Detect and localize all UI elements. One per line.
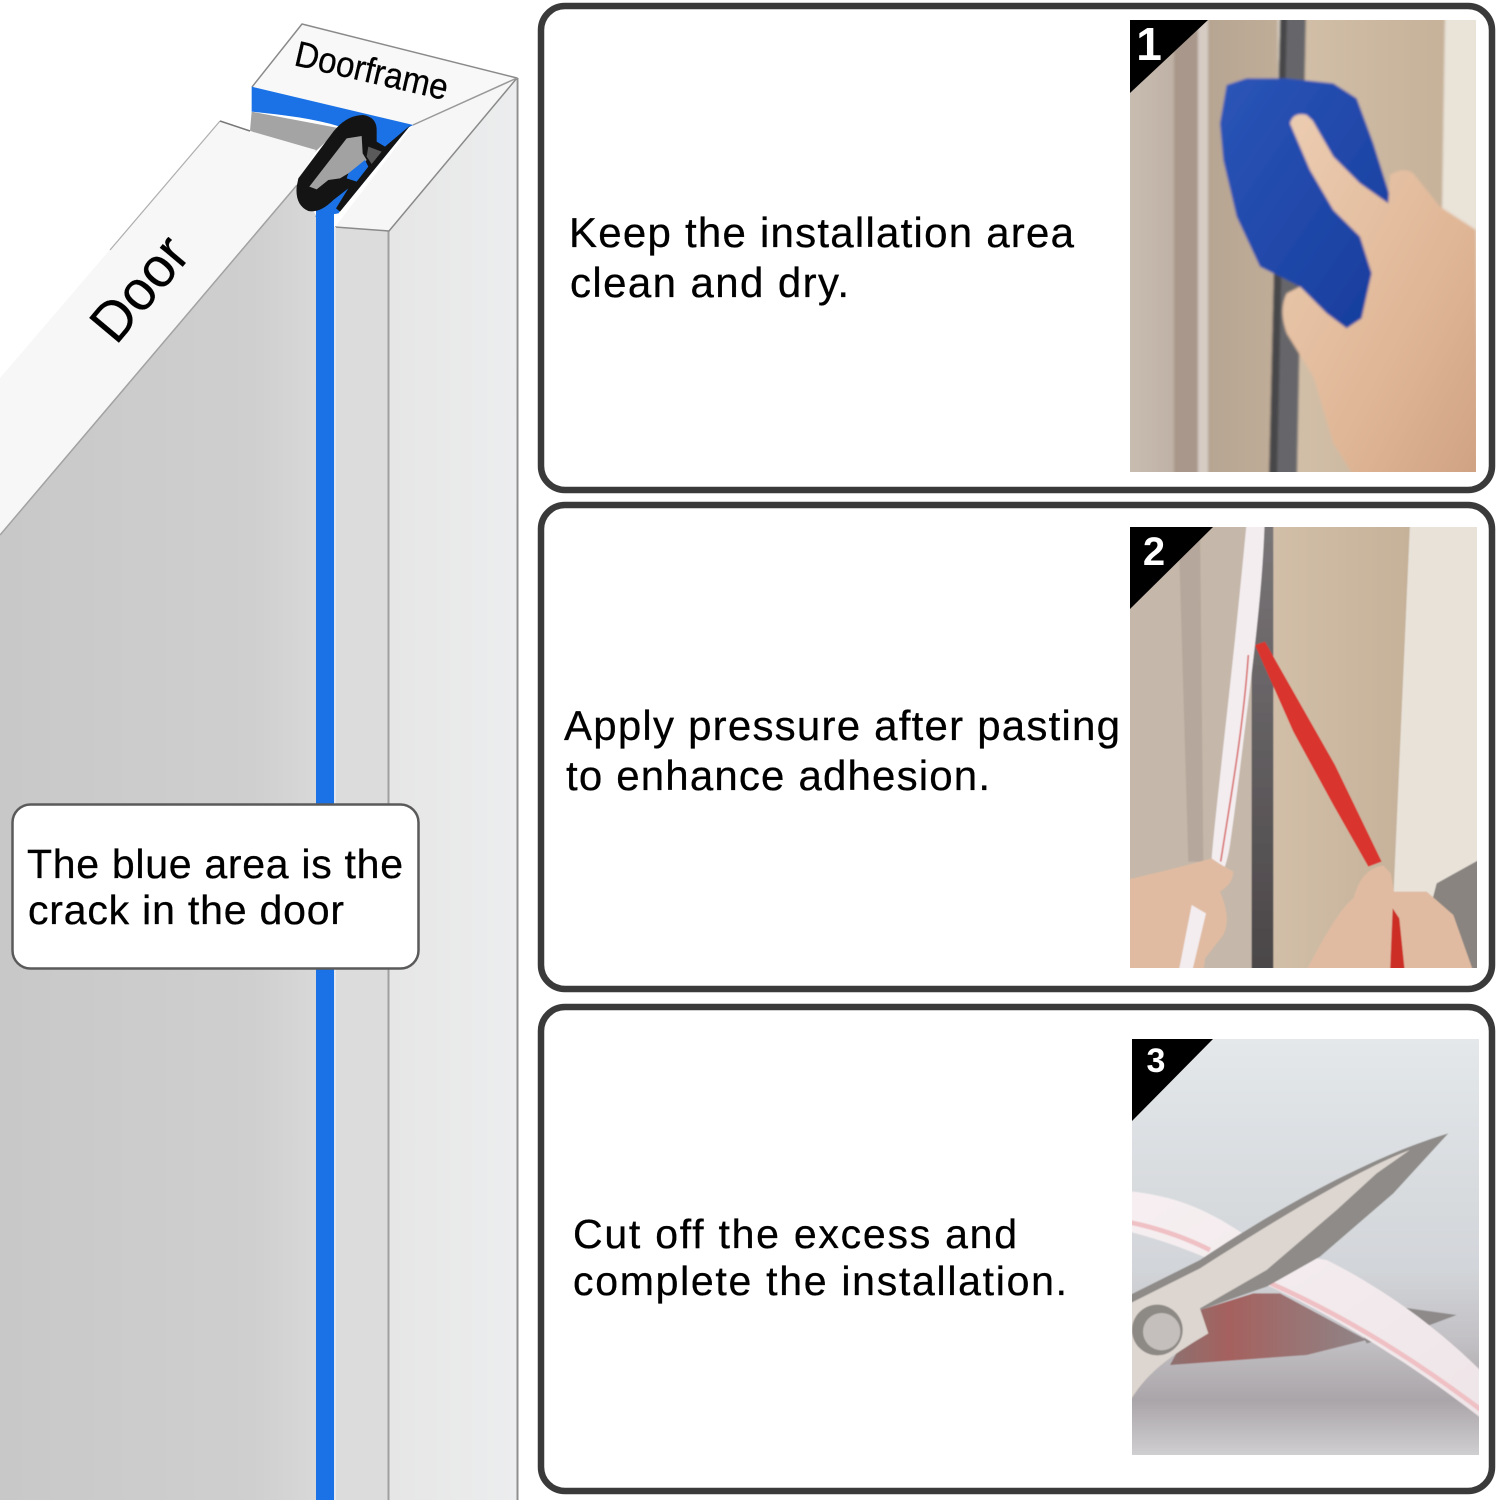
hand (1282, 114, 1478, 475)
step number badge 3: 3 (1147, 1042, 1165, 1080)
lower blade (1170, 1293, 1367, 1365)
upper blade and handle (1132, 1133, 1448, 1310)
white seal tube (1127, 1191, 1483, 1420)
step 2 instruction text: to enhance adhesion. (566, 752, 990, 799)
photo: cutting the excess seal with scissors (1127, 1035, 1483, 1460)
door crack: blue area in the frame (250, 87, 413, 217)
photo: wiping the door frame with a blue cloth (1125, 15, 1481, 477)
pivot screw (1132, 1305, 1183, 1355)
panel: step 1 (541, 6, 1492, 490)
step number badge 2: 2 (1143, 530, 1165, 574)
door and doorframe diagram (0, 24, 518, 1500)
step 3 instruction text (573, 1211, 1067, 1304)
step 3 instruction text: complete the installation. (573, 1258, 1067, 1304)
blue cloth (1220, 78, 1392, 328)
step 1 instruction text: clean and dry. (570, 259, 849, 306)
left hand (1125, 858, 1233, 973)
white seal strip (1211, 527, 1266, 868)
panel frame (541, 6, 1492, 490)
label: Door: Door (77, 223, 201, 354)
right hand (1305, 866, 1474, 973)
step 2 instruction text (564, 702, 1120, 799)
door face (0, 185, 316, 1500)
label: Doorframe: Doorframe (291, 33, 452, 108)
callout: the blue area is the crack (12, 804, 418, 968)
red backing tape (1255, 642, 1382, 867)
doorframe front and side faces (334, 78, 518, 1500)
rubber seal profile (296, 115, 411, 217)
door top face (0, 121, 316, 535)
step number badge 1 (1130, 18, 1208, 93)
step number badge 2 (1130, 527, 1213, 609)
doorframe top face (252, 24, 517, 231)
blue strip: crack between door and frame (316, 205, 334, 1500)
step 3 instruction text: Cut off the excess and (573, 1211, 1017, 1257)
panel frame (541, 505, 1492, 989)
panel frame (541, 1007, 1492, 1491)
step number badge 1: 1 (1136, 18, 1162, 70)
photo: pressing the seal and peeling red backing (1125, 522, 1482, 973)
panel: step 3 (541, 1007, 1492, 1491)
step number badge 3 (1132, 1039, 1213, 1121)
panel: step 2 (541, 505, 1492, 989)
step 1 instruction text: Keep the installation area (569, 209, 1075, 256)
callout: the blue area is the crack: crack in the door (28, 887, 344, 933)
callout: the blue area is the crack: The blue area is the (27, 841, 403, 887)
step 2 instruction text: Apply pressure after pasting (564, 702, 1120, 749)
step 1 instruction text (569, 209, 1075, 306)
